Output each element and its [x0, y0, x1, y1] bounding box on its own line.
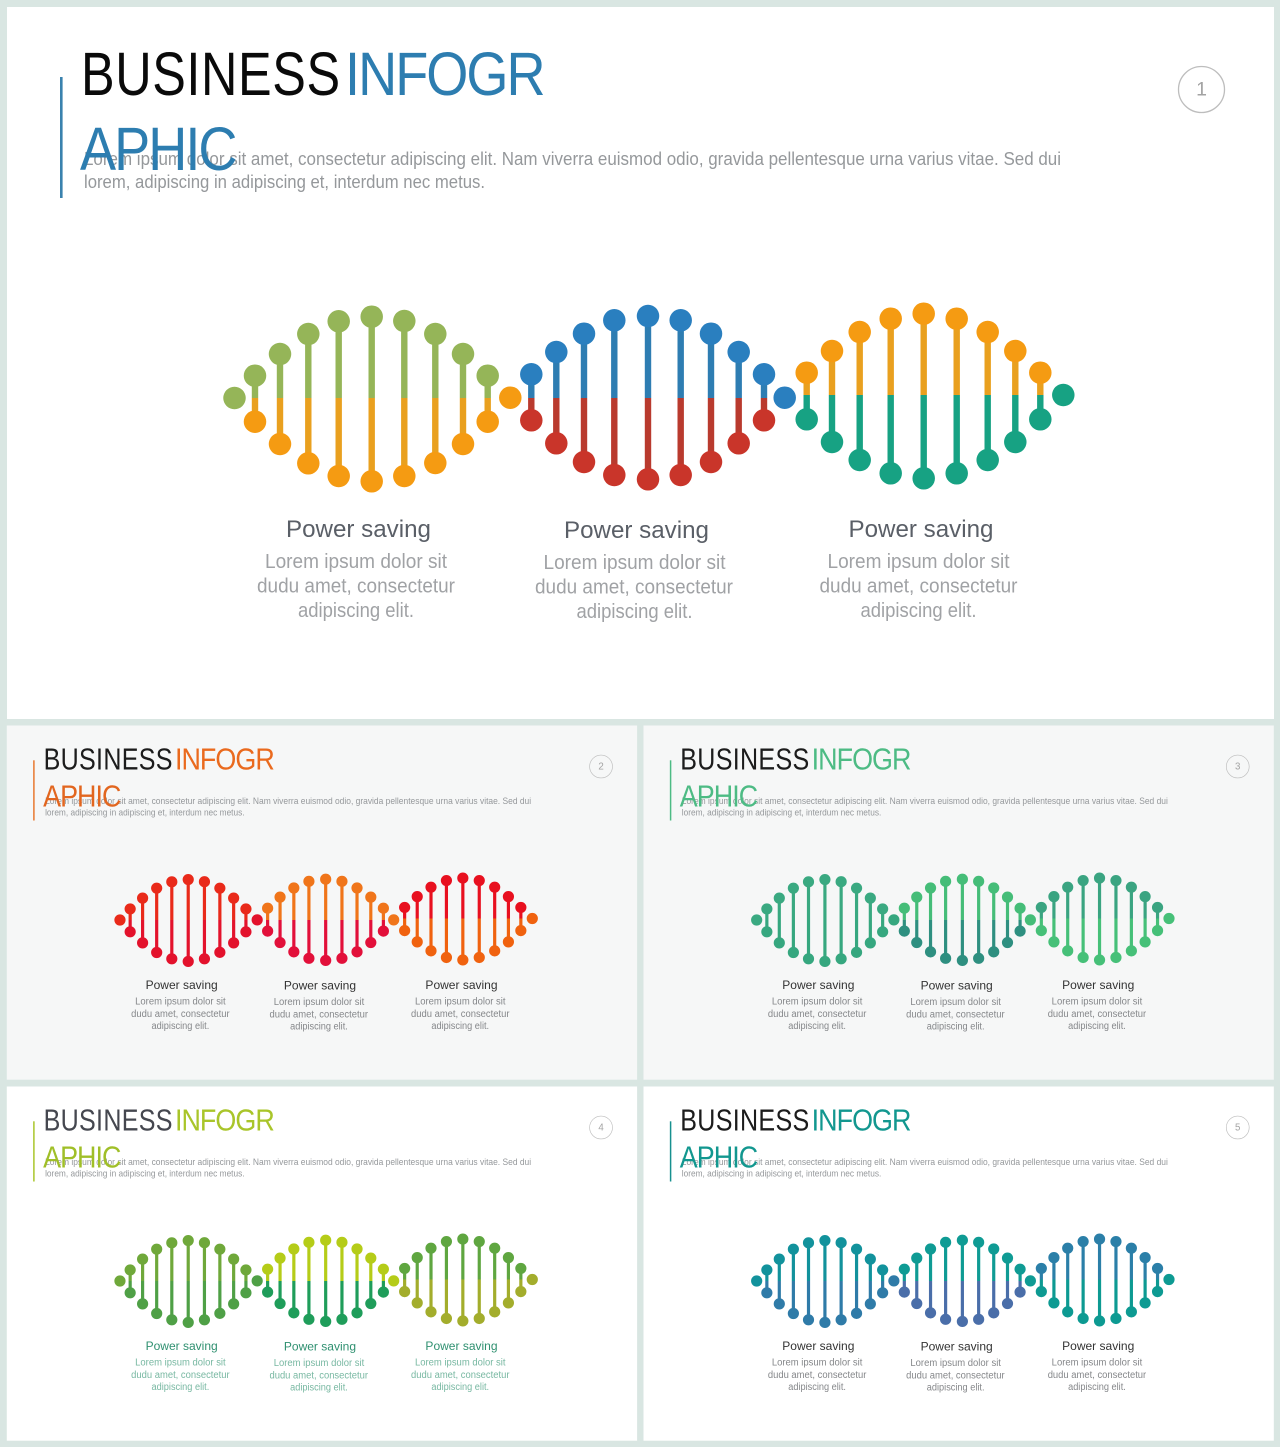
intro text: Lorem ipsum dolor sit amet, consectetur adipiscing elit. Nam viverra euismod odio, gravida pellentesque urna varius vitae. Sed dui: [682, 1157, 1168, 1167]
dna helix: sea green and light green: [1041, 878, 1169, 960]
column text 3: [1048, 1339, 1147, 1393]
column text 3: adipiscing elit.: [1068, 1382, 1126, 1393]
column text 3: dudu amet, consectetur: [1048, 1009, 1147, 1020]
column text 1: adipiscing elit.: [298, 599, 414, 622]
column text 1: Power saving: [782, 1339, 854, 1353]
column text 3: adipiscing elit.: [431, 1021, 489, 1032]
intro text: [682, 1157, 1168, 1179]
accent bar: [33, 760, 35, 821]
column text 2: adipiscing elit.: [927, 1382, 985, 1393]
title: INFOGR: [345, 41, 546, 109]
column text 1: dudu amet, consectetur: [131, 1009, 230, 1020]
column text 1: Lorem ipsum dolor sit: [135, 997, 226, 1008]
column text 3: adipiscing elit.: [860, 599, 976, 622]
page number badge: [590, 755, 612, 778]
panel: slide 3 green: [643, 725, 1274, 1080]
column text 1: Power saving: [146, 978, 218, 992]
dna helix: red and orange: [405, 878, 532, 960]
column text 1: Lorem ipsum dolor sit: [265, 550, 447, 573]
title: [80, 39, 546, 184]
column text 3: Power saving: [425, 1339, 498, 1353]
column text 2: Lorem ipsum dolor sit: [910, 1358, 1001, 1369]
column text 1: dudu amet, consectetur: [768, 1009, 867, 1020]
dna helix: light and dark green: [904, 879, 1030, 960]
title: INFOGR: [175, 743, 275, 777]
accent bar: [60, 77, 63, 198]
page number badge: 3: [1235, 762, 1240, 773]
column text 1: [131, 978, 230, 1032]
column text 1: Lorem ipsum dolor sit: [772, 997, 863, 1008]
intro text: lorem, adipiscing in adipiscing et, interdum nec metus.: [84, 172, 485, 192]
column text 2: [269, 979, 369, 1032]
column text 3: adipiscing elit.: [1068, 1021, 1126, 1032]
accent bar: [670, 760, 671, 821]
intro text: [682, 796, 1168, 818]
title: APHIC: [43, 780, 121, 814]
column text 1: adipiscing elit.: [152, 1382, 209, 1393]
column text 2: adipiscing elit.: [576, 600, 692, 623]
column text 3: Lorem ipsum dolor sit: [415, 1358, 506, 1369]
column text 2: [535, 517, 733, 623]
dna helix: leaf green: [120, 1241, 257, 1322]
accent bar: [670, 1121, 671, 1182]
title: BUSINESS: [44, 1103, 173, 1137]
column text 3: Power saving: [1062, 978, 1134, 992]
title: BUSINESS: [81, 39, 340, 108]
column text 3: [411, 978, 510, 1032]
title: [43, 1103, 275, 1175]
column text 2: Lorem ipsum dolor sit: [274, 1358, 364, 1369]
dna helix: blue and red: [531, 316, 785, 479]
dna helix: orange and crimson: [268, 879, 394, 960]
column text 3: Power saving: [425, 978, 498, 992]
dna helix: orange and teal: [807, 314, 1063, 478]
column text 1: Lorem ipsum dolor sit: [772, 1358, 863, 1369]
column text 1: adipiscing elit.: [788, 1021, 846, 1032]
intro text: lorem, adipiscing in adipiscing et, interdum nec metus.: [45, 1169, 245, 1179]
column text 2: Power saving: [921, 979, 993, 993]
title: APHIC: [80, 116, 238, 184]
title: BUSINESS: [680, 1103, 809, 1137]
intro text: Lorem ipsum dolor sit amet, consectetur adipiscing elit. Nam viverra euismod odio, gravida pellentesque urna varius vitae. Sed dui: [84, 149, 1061, 169]
intro text: Lorem ipsum dolor sit amet, consectetur adipiscing elit. Nam viverra euismod odio, gravida pellentesque urna varius vitae. Sed dui: [682, 796, 1168, 806]
column text 2: dudu amet, consectetur: [269, 1370, 369, 1381]
column text 2: adipiscing elit.: [290, 1382, 348, 1393]
intro text: Lorem ipsum dolor sit amet, consectetur adipiscing elit. Nam viverra euismod odio, gravida pellentesque urna varius vitae. Sed dui: [45, 796, 531, 806]
column text 3: dudu amet, consectetur: [411, 1009, 510, 1020]
column text 3: dudu amet, consectetur: [1048, 1370, 1147, 1381]
column text 2: Lorem ipsum dolor sit: [910, 997, 1001, 1008]
column text 1: dudu amet, consectetur: [131, 1370, 230, 1381]
page number badge: [1226, 755, 1249, 778]
panel: slide 2 red orange: [7, 725, 637, 1080]
column text 3: Power saving: [1062, 1339, 1134, 1353]
column text 3: adipiscing elit.: [431, 1382, 489, 1393]
intro text: [45, 1157, 531, 1179]
column text 1: Power saving: [146, 1339, 218, 1353]
page number badge: [1178, 66, 1224, 112]
column text 1: Power saving: [782, 978, 854, 992]
dna helix: blue and teal: [1041, 1239, 1169, 1321]
column text 3: [1048, 978, 1147, 1032]
intro text: lorem, adipiscing in adipiscing et, interdum nec metus.: [682, 808, 881, 818]
title: APHIC: [43, 1141, 121, 1175]
title: INFOGR: [812, 1104, 911, 1138]
title: [680, 1103, 911, 1175]
dna helix: lime and emerald: [268, 1240, 394, 1321]
column text 2: dudu amet, consectetur: [906, 1009, 1005, 1020]
title: APHIC: [680, 1141, 758, 1175]
column text 2: Lorem ipsum dolor sit: [544, 551, 726, 574]
column text 2: Power saving: [284, 1340, 356, 1354]
column text 2: [906, 1340, 1005, 1393]
column text 2: dudu amet, consectetur: [535, 576, 733, 598]
column text 2: Power saving: [921, 1340, 993, 1354]
intro text: lorem, adipiscing in adipiscing et, interdum nec metus.: [682, 1169, 881, 1179]
panel: slide 1 blue main: [7, 7, 1274, 719]
title: [43, 742, 275, 814]
column text 3: Lorem ipsum dolor sit: [1052, 1358, 1142, 1369]
title: INFOGR: [812, 743, 911, 777]
dna helix: teal and blue: [757, 1241, 894, 1322]
column text 3: Lorem ipsum dolor sit: [415, 997, 506, 1008]
column text 2: adipiscing elit.: [290, 1021, 348, 1032]
dna helix: red: [120, 880, 257, 961]
column text 2: [906, 979, 1005, 1032]
column text 2: [269, 1340, 369, 1393]
title: INFOGR: [175, 1104, 275, 1138]
column text 3: Lorem ipsum dolor sit: [1052, 997, 1142, 1008]
column text 1: [768, 978, 867, 1032]
intro text: lorem, adipiscing in adipiscing et, interdum nec metus.: [45, 808, 245, 818]
column text 1: [257, 516, 455, 622]
column text 1: Power saving: [286, 516, 431, 543]
intro text: Lorem ipsum dolor sit amet, consectetur adipiscing elit. Nam viverra euismod odio, gravida pellentesque urna varius vitae. Sed dui: [45, 1157, 531, 1167]
column text 2: dudu amet, consectetur: [269, 1009, 369, 1020]
column text 1: adipiscing elit.: [788, 1382, 846, 1393]
column text 2: adipiscing elit.: [927, 1021, 985, 1032]
column text 1: dudu amet, consectetur: [768, 1370, 867, 1381]
title: BUSINESS: [44, 742, 173, 776]
column text 3: [411, 1339, 510, 1393]
dna helix: sea green: [757, 880, 894, 961]
title: [680, 742, 911, 814]
column text 2: Power saving: [564, 517, 709, 544]
column text 3: dudu amet, consectetur: [411, 1370, 510, 1381]
panel: slide 5 teal: [643, 1086, 1274, 1441]
dna helix: green and orange: [234, 317, 510, 481]
accent bar: [33, 1121, 35, 1182]
column text 1: dudu amet, consectetur: [257, 574, 455, 598]
column text 1: [768, 1339, 867, 1393]
column text 1: adipiscing elit.: [152, 1021, 209, 1032]
page number badge: 2: [598, 762, 604, 773]
intro text: [45, 796, 531, 818]
column text 3: [820, 516, 1018, 622]
column text 1: [131, 1339, 230, 1393]
column text 2: Lorem ipsum dolor sit: [274, 997, 364, 1008]
column text 2: dudu amet, consectetur: [906, 1370, 1005, 1381]
page number badge: [1226, 1116, 1249, 1139]
title: APHIC: [680, 780, 758, 814]
column text 1: Lorem ipsum dolor sit: [135, 1358, 226, 1369]
column text 3: dudu amet, consectetur: [820, 574, 1018, 598]
column text 3: Lorem ipsum dolor sit: [828, 550, 1010, 573]
column text 2: Power saving: [284, 979, 356, 993]
page number badge: 4: [598, 1123, 604, 1134]
page number badge: 5: [1235, 1123, 1240, 1134]
intro text: [84, 149, 1061, 192]
title: BUSINESS: [680, 742, 809, 776]
dna helix: teal and indigo: [904, 1240, 1030, 1321]
panel: slide 4 lime: [7, 1086, 637, 1441]
page number badge: 1: [1196, 78, 1207, 100]
dna helix: green and olive: [405, 1239, 532, 1321]
page number badge: [590, 1116, 612, 1139]
column text 3: Power saving: [848, 516, 994, 543]
